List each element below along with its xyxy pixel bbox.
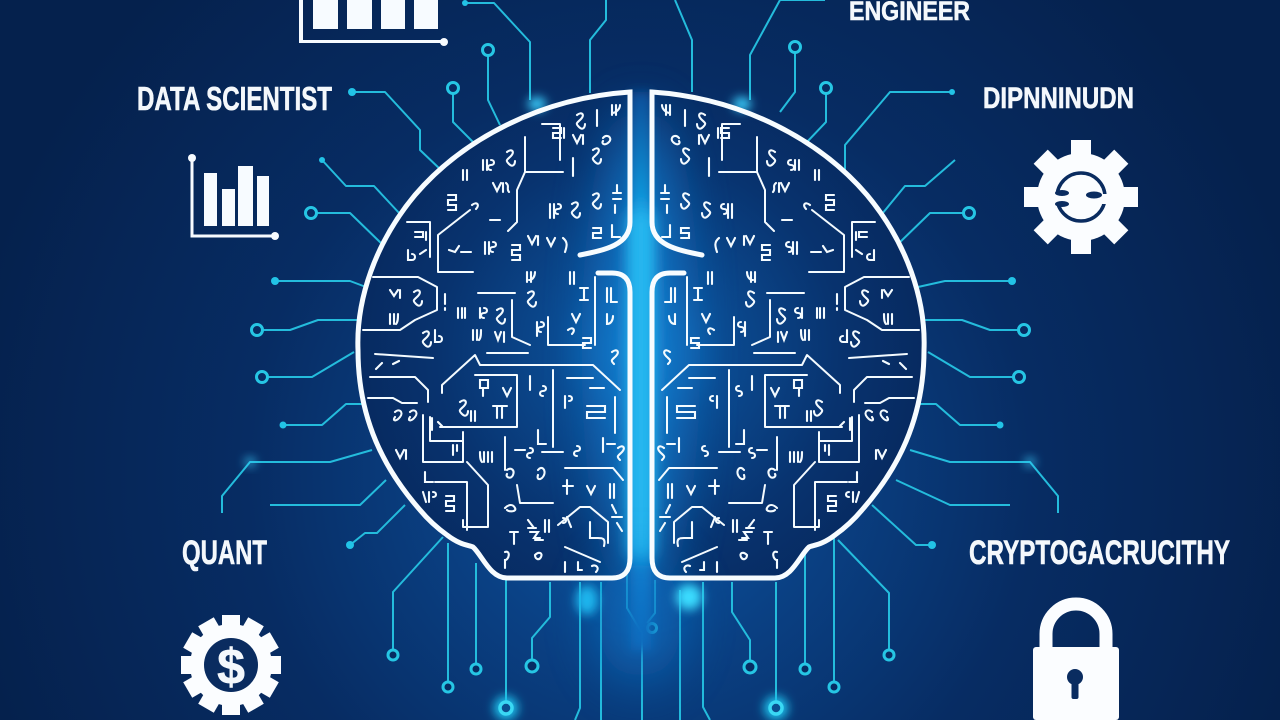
label: garbled upper right: DIPNNINUDN bbox=[983, 82, 1134, 115]
brain outline: right hemisphere bbox=[652, 92, 924, 578]
icon: gear with face bbox=[1024, 140, 1138, 254]
brain outline: left hemisphere bbox=[358, 92, 630, 578]
circuit pattern: left hemisphere bbox=[363, 105, 624, 572]
icon: bar chart bbox=[188, 154, 279, 240]
icon: top bar chart bbox=[299, 0, 448, 46]
traces: left connections bbox=[222, 0, 656, 720]
central glow bbox=[245, 92, 1035, 680]
icon: padlock bbox=[1033, 604, 1119, 720]
traces: right connections bbox=[675, 0, 1058, 720]
icon: gear with dollar sign: $ bbox=[217, 639, 245, 695]
icon: gear with dollar sign bbox=[181, 615, 281, 715]
label: data scientist: DATA SCIENTIST bbox=[137, 80, 332, 117]
brain fill bbox=[358, 92, 924, 578]
label: quant: QUANT bbox=[182, 534, 267, 572]
circuit pattern: right hemisphere bbox=[658, 105, 919, 572]
